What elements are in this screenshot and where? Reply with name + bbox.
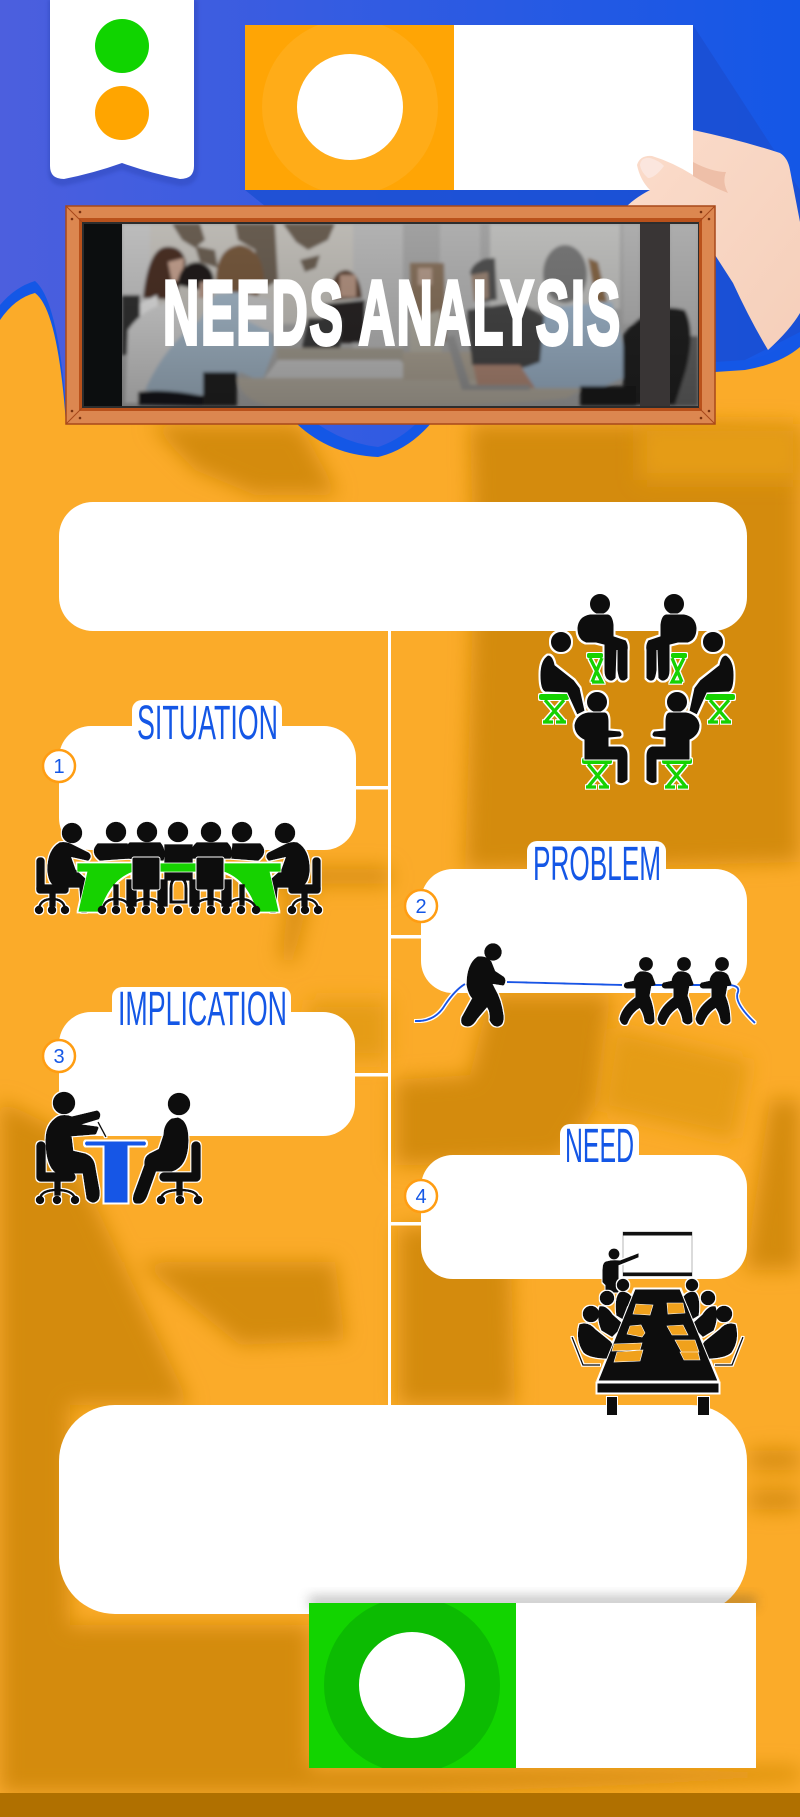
panel: need — [405, 1120, 747, 1279]
meeting table with people — [572, 1280, 743, 1415]
heading: implication — [112, 983, 291, 1036]
icon: team at boardroom table — [36, 822, 322, 914]
panel: conclusion — [59, 1405, 747, 1614]
card shadow on blue — [245, 25, 800, 362]
panel: problem — [405, 838, 747, 993]
presenter — [603, 1249, 638, 1292]
heading: problem — [527, 838, 666, 891]
panel: implication — [43, 983, 355, 1136]
heading: implication: IMPLICATION — [118, 983, 287, 1036]
number badge 3 — [43, 1040, 75, 1072]
heading: need — [560, 1120, 639, 1173]
icon: hand holding card — [627, 130, 800, 350]
panel: situation — [43, 697, 356, 850]
heading: situation: SITUATION — [137, 697, 278, 750]
presentation board — [623, 1232, 692, 1276]
panel: intro — [59, 502, 747, 631]
green table — [77, 863, 281, 912]
icon: presentation and meeting table — [572, 1232, 743, 1415]
seated team — [36, 822, 322, 914]
front chairs — [98, 857, 260, 914]
footer bar — [0, 1793, 800, 1817]
left chair — [36, 1142, 78, 1204]
number badge 4 — [405, 1180, 437, 1212]
number badge 4: 4 — [415, 1186, 427, 1208]
title: NEEDS ANALYSIS — [163, 262, 622, 364]
left person — [47, 1092, 106, 1201]
right person — [134, 1094, 190, 1202]
icon: six people seated in a circle — [539, 594, 735, 787]
blue table — [84, 1141, 146, 1203]
picture frame with title — [66, 206, 715, 424]
meeting photo — [84, 224, 698, 406]
right chair — [158, 1142, 202, 1204]
icon: tug of war — [415, 944, 755, 1025]
number badge 1: 1 — [53, 756, 65, 778]
icon: two people across a table — [36, 1092, 202, 1204]
number badge 2: 2 — [415, 896, 427, 918]
stools — [539, 653, 735, 764]
wooden frame — [66, 206, 715, 424]
bottom card with green tab — [309, 1597, 756, 1773]
top card with orange tab — [245, 19, 693, 195]
number badge 2 — [405, 890, 437, 922]
bookmark badge — [48, 0, 198, 186]
timeline spine and connectors — [355, 630, 422, 1406]
icon: green dot — [95, 19, 149, 73]
icon: orange dot — [95, 86, 149, 140]
documents on table — [612, 1303, 700, 1362]
heading: situation — [132, 697, 282, 750]
heading: need: NEED — [565, 1120, 634, 1173]
blue header background with wave — [0, 0, 800, 457]
number badge 3: 3 — [53, 1046, 65, 1068]
heading: problem: PROBLEM — [533, 838, 661, 891]
number badge 1 — [43, 750, 75, 782]
rope — [415, 982, 755, 1023]
